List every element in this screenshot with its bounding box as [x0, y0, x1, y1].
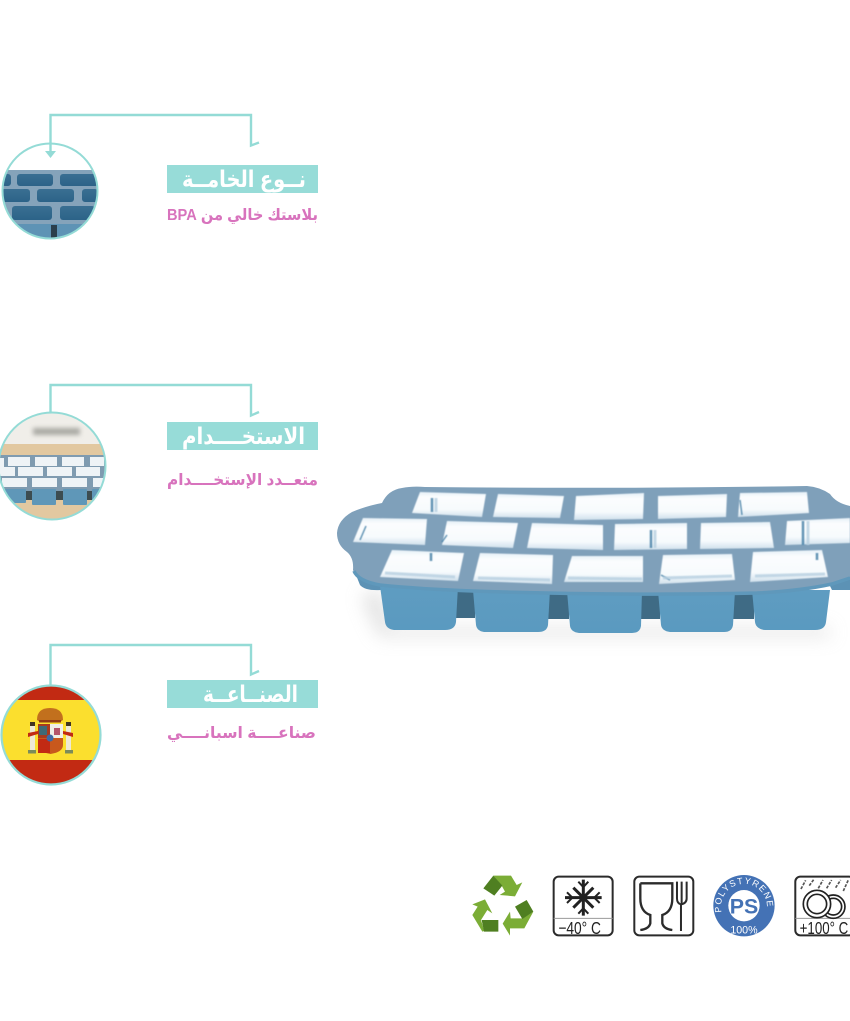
label banner: origin [167, 680, 318, 708]
callout: usage [0, 385, 318, 520]
icon: polystyrene PS 100%: PS [730, 895, 758, 919]
product: ice cube tray [337, 486, 850, 636]
coat of arms [28, 708, 73, 754]
description: made in Spain: صناعــــة اسبانــــي [167, 725, 316, 743]
icon: Spanish flag [0, 685, 102, 785]
callout: material [0, 115, 318, 240]
connector arrow: material [45, 115, 259, 158]
icon: freezer safe -40C [554, 877, 613, 938]
icon: freezer safe -40C: −40° C [558, 918, 601, 938]
description: multi-use: متعــدد الإستخــــدام [167, 472, 318, 489]
front ice cubes [380, 586, 830, 633]
icon: polystyrene PS 100%: 100% [730, 925, 758, 937]
icon: food safe [634, 877, 693, 935]
dark ice fissures [360, 498, 817, 580]
description: BPA free plastic: بلاستك خالي من BPA [167, 207, 318, 225]
icon: recycling symbol [472, 876, 533, 936]
callout: origin [0, 645, 318, 785]
icon: dishwasher safe +100C [795, 877, 850, 938]
label banner: material: نــوع الخامــة [182, 166, 306, 193]
label banner: origin: الصنــاعــة [203, 681, 298, 707]
icon: polystyrene PS 100% [713, 875, 775, 937]
tray shadow [362, 590, 830, 636]
ice-filled wells [353, 492, 850, 584]
icon: polystyrene PS 100%: POLYSTYRENE [714, 877, 774, 912]
tray rim highlight [354, 571, 850, 594]
photo: tray material close-up [0, 144, 100, 240]
photo: tray in use [0, 412, 106, 520]
certification icons [472, 875, 850, 938]
ice frost bands [385, 498, 825, 580]
underside tabs [356, 575, 850, 590]
connector arrow: origin [45, 645, 259, 697]
tray body [337, 486, 850, 593]
connector arrow: usage [45, 385, 259, 428]
gaps between ice cubes [455, 588, 754, 619]
label banner: usage: الاستخــــدام [182, 423, 305, 450]
